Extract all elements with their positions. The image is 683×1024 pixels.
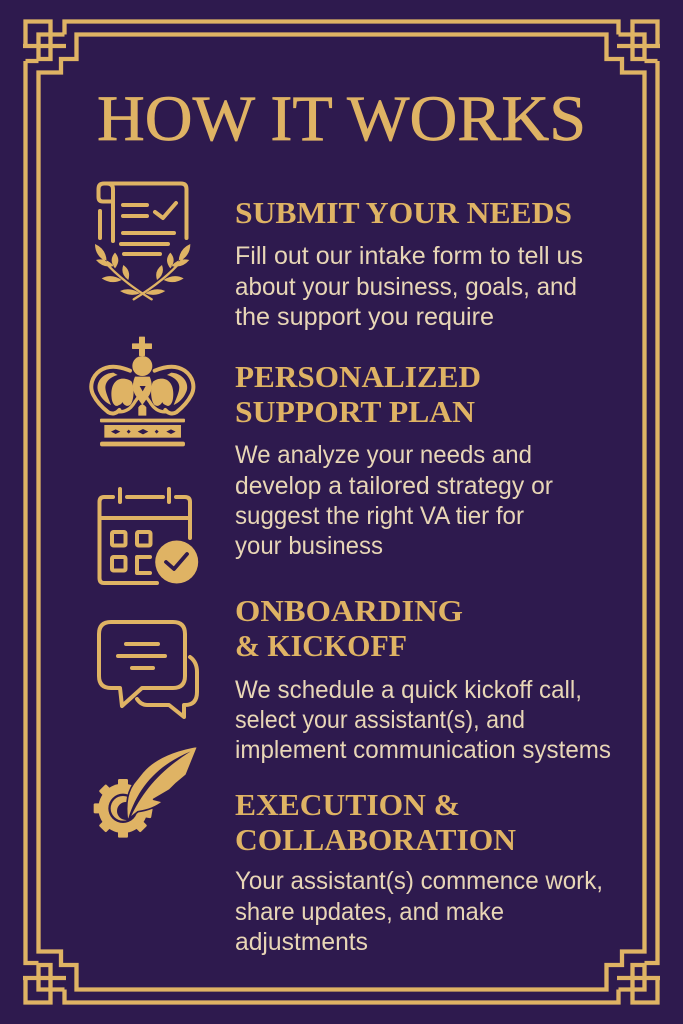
step 2: personalized support plan: PERSONALIZED: [235, 359, 481, 394]
title: HOW IT WORKS: [97, 83, 586, 155]
step 1: submit your needs: the support you require: [235, 303, 494, 331]
step 2: personalized support plan: [235, 359, 553, 560]
step 4: execution and collaboration: EXECUTION &: [235, 787, 460, 822]
step 2: personalized support plan: develop a tailored strategy or: [235, 472, 553, 500]
step 4: execution and collaboration: Your assistant(s) commence work,: [235, 867, 603, 895]
step 3: onboarding and kickoff: [235, 593, 611, 764]
icon: crown: [91, 337, 193, 446]
step 4: execution and collaboration: [235, 787, 603, 956]
step 1: submit your needs: about your business, goals, and: [235, 273, 577, 301]
step 3: onboarding and kickoff: select your assistant(s), and: [235, 706, 525, 734]
icon: quill and gear: [94, 746, 198, 838]
step 1: submit your needs: Fill out our intake form to tell us: [235, 242, 583, 270]
step 2: personalized support plan: suggest the right VA tier for: [235, 502, 524, 530]
step 4: execution and collaboration: adjustments: [235, 928, 368, 956]
icon: chat bubbles: [99, 622, 197, 717]
icon: calendar: [100, 489, 198, 584]
step 4: execution and collaboration: share updates, and make: [235, 898, 504, 926]
step 3: onboarding and kickoff: ONBOARDING: [235, 593, 463, 628]
step 2: personalized support plan: your business: [235, 532, 383, 560]
step 1: submit your needs: SUBMIT YOUR NEEDS: [235, 195, 572, 230]
step 3: onboarding and kickoff: We schedule a quick kickoff call,: [235, 676, 582, 704]
step 3: onboarding and kickoff: & KICKOFF: [235, 628, 407, 663]
step 2: personalized support plan: SUPPORT PLAN: [235, 394, 475, 429]
icon: scroll with laurel: [95, 184, 190, 299]
step 3: onboarding and kickoff: implement communication systems: [235, 736, 611, 764]
step 2: personalized support plan: We analyze your needs and: [235, 441, 532, 469]
step 4: execution and collaboration: COLLABORATION: [235, 822, 516, 857]
step 1: submit your needs: [235, 195, 583, 331]
